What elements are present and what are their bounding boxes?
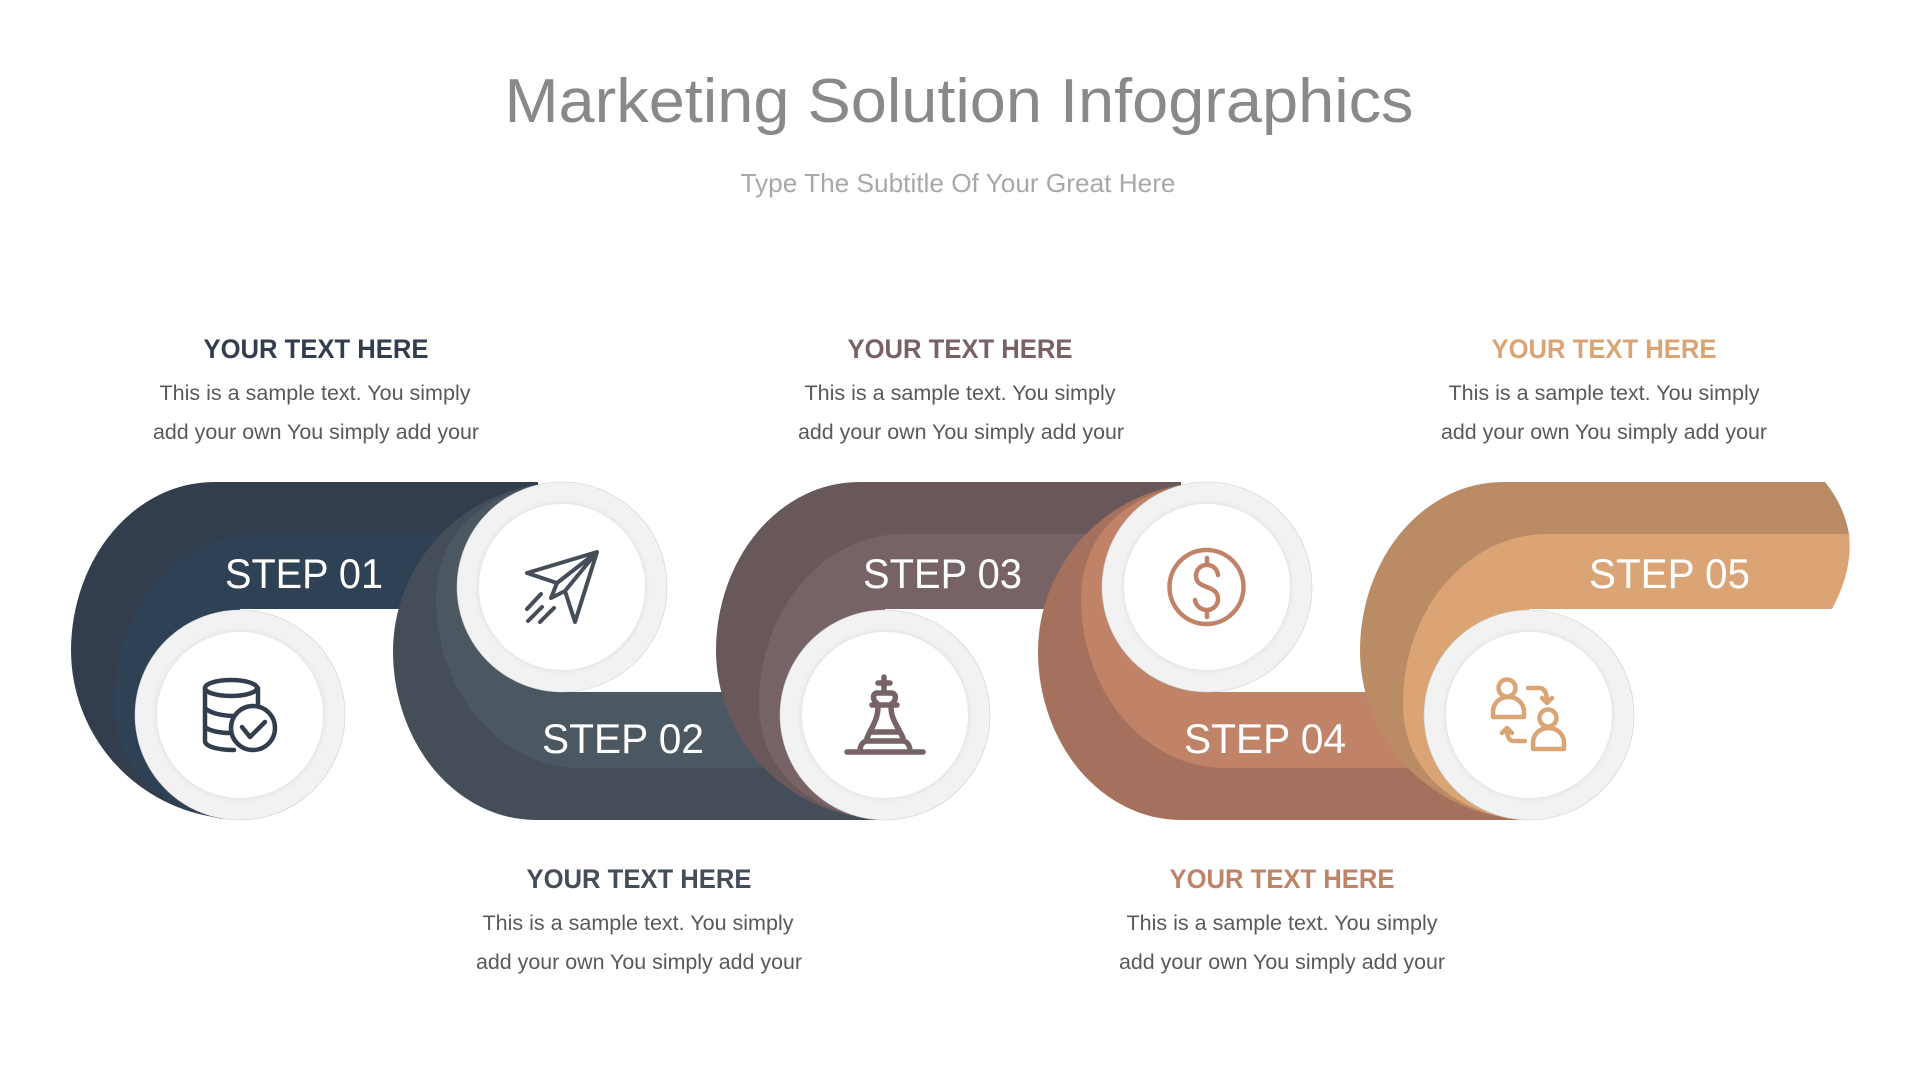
step 2 text block bbox=[476, 864, 802, 974]
step 5 body line 1: This is a sample text. You simply bbox=[1448, 382, 1760, 405]
title: Marketing Solution Infographics bbox=[504, 67, 1414, 136]
step 4 body line 1: This is a sample text. You simply bbox=[1126, 912, 1438, 935]
step 4 inner shape bbox=[1081, 485, 1525, 768]
step 3 inner shape bbox=[759, 534, 1183, 819]
step 4 body line 2: add your own You simply add your bbox=[1119, 951, 1445, 974]
step 4 heading: YOUR TEXT HERE bbox=[1170, 864, 1394, 894]
step 5 body line 2: add your own You simply add your bbox=[1441, 421, 1767, 444]
step 2 outer shape bbox=[393, 485, 880, 820]
step 3 body line 1: This is a sample text. You simply bbox=[804, 382, 1116, 405]
step 2 body line 1: This is a sample text. You simply bbox=[482, 912, 794, 935]
step 1 inner shape bbox=[114, 534, 540, 819]
icon: database with check bbox=[205, 680, 275, 750]
step 1 label: STEP 01 bbox=[225, 550, 383, 597]
step 1 text block bbox=[153, 334, 479, 444]
step 5 badge bbox=[1424, 610, 1634, 820]
step 5 label: STEP 05 bbox=[1589, 550, 1750, 597]
step 5 outer shape bbox=[1360, 482, 1849, 817]
icon: paper plane bbox=[527, 552, 597, 622]
step 1 badge bbox=[135, 610, 345, 820]
step 3 text block bbox=[798, 334, 1124, 444]
step 1 outer shape bbox=[71, 482, 538, 817]
step 4 label: STEP 04 bbox=[1184, 715, 1346, 762]
step 2 badge bbox=[457, 482, 667, 692]
step 4 band bbox=[1038, 482, 1525, 820]
step 2 inner shape bbox=[436, 485, 880, 768]
step 3 outer shape bbox=[716, 482, 1181, 817]
step 3 label: STEP 03 bbox=[863, 550, 1022, 597]
step 2 body line 2: add your own You simply add your bbox=[476, 951, 802, 974]
step 3 heading: YOUR TEXT HERE bbox=[848, 334, 1072, 364]
step 3 badge bbox=[780, 610, 990, 820]
step 2 band bbox=[393, 482, 880, 820]
step 5 band bbox=[1360, 482, 1850, 820]
step 4 outer shape bbox=[1038, 485, 1525, 820]
step 5 heading: YOUR TEXT HERE bbox=[1492, 334, 1716, 364]
step 5 text block bbox=[1441, 334, 1767, 444]
step 5 inner shape bbox=[1403, 534, 1850, 819]
step 1 body line 2: add your own You simply add your bbox=[153, 421, 479, 444]
step 2 heading: YOUR TEXT HERE bbox=[526, 864, 752, 894]
step 3 body line 2: add your own You simply add your bbox=[798, 421, 1124, 444]
step 4 badge bbox=[1102, 482, 1312, 692]
step 1 heading: YOUR TEXT HERE bbox=[204, 334, 428, 364]
step 3 band bbox=[716, 482, 1183, 820]
subtitle: Type The Subtitle Of Your Great Here bbox=[740, 168, 1176, 198]
icon: people exchange bbox=[1493, 680, 1564, 749]
step 4 text block bbox=[1119, 864, 1445, 974]
step 1 body line 1: This is a sample text. You simply bbox=[160, 382, 471, 405]
icon: chess king bbox=[847, 677, 923, 752]
step 2 label: STEP 02 bbox=[542, 715, 704, 762]
icon: dollar coin bbox=[1170, 550, 1244, 624]
step 1 band bbox=[71, 482, 540, 820]
